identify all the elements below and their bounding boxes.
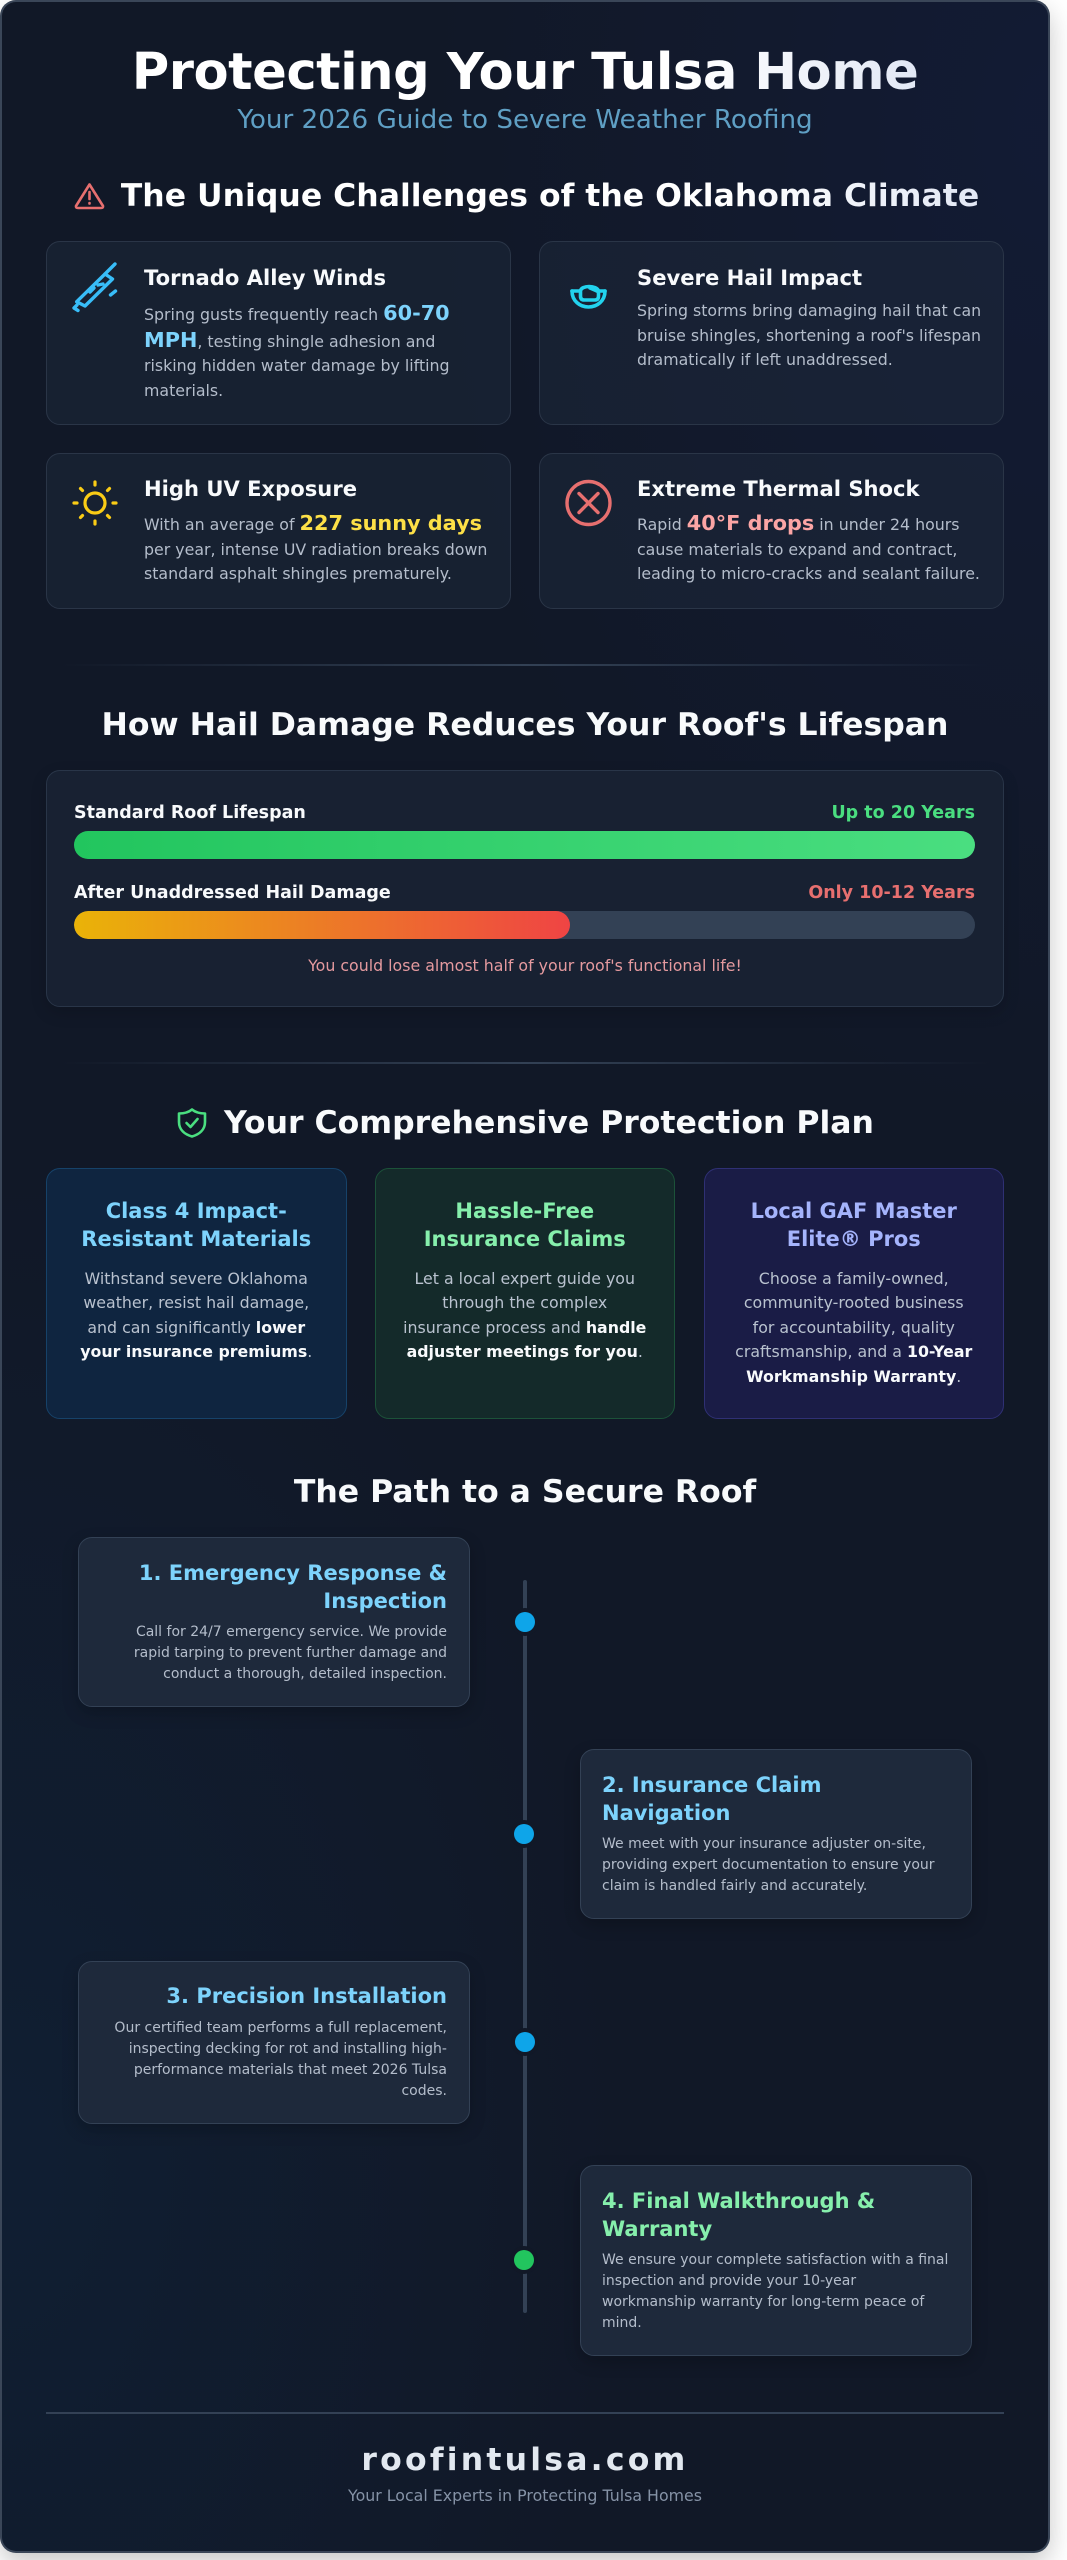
icon: shield check bbox=[178, 1108, 206, 1138]
label: standard: Standard Roof Lifespan bbox=[74, 803, 306, 823]
text: conduct a thorough, detailed inspection. bbox=[163, 1666, 447, 1682]
text: providing expert documentation to ensure your bbox=[602, 1857, 935, 1873]
bar: standard lifespan bbox=[74, 831, 975, 859]
icon: x circle bbox=[565, 480, 612, 526]
icon: wind bbox=[72, 262, 118, 312]
text: standard asphalt shingles prematurely. bbox=[144, 564, 452, 583]
text: leading to micro-cracks and sealant failure. bbox=[637, 564, 980, 583]
text bbox=[403, 1269, 646, 1361]
heading: challenges: The Unique Challenges of the Oklahoma Climate bbox=[121, 178, 979, 214]
text: craftsmanship, and a 10-Year bbox=[735, 1342, 972, 1361]
text bbox=[80, 1269, 312, 1361]
panel: insurance claims bbox=[374, 1168, 675, 1419]
heading bbox=[602, 2189, 875, 2241]
heading: Inspection bbox=[323, 1589, 447, 1613]
label: after damage: After Unaddressed Hail Damage bbox=[74, 883, 391, 903]
text: workmanship warranty for long-term peace of bbox=[602, 2294, 924, 2310]
heading: Hassle-Free bbox=[455, 1199, 594, 1223]
heading: Severe Hail Impact bbox=[637, 265, 862, 290]
bar: reduced lifespan bbox=[74, 911, 975, 939]
dot 3 bbox=[515, 2032, 535, 2052]
step 1 bbox=[78, 1537, 470, 1707]
heading: Navigation bbox=[602, 1801, 730, 1825]
text: mind. bbox=[602, 2315, 642, 2331]
timeline line bbox=[523, 1580, 527, 2313]
heading: Extreme Thermal Shock bbox=[637, 476, 920, 501]
text: performance materials that meet 2026 Tulsa bbox=[134, 2062, 447, 2078]
heading: Class 4 Impact- bbox=[106, 1199, 287, 1223]
title: Protecting Your Tulsa Home bbox=[132, 42, 918, 102]
text: Spring storms bring damaging hail that can bbox=[637, 301, 981, 320]
heading: Insurance Claims bbox=[424, 1227, 626, 1251]
text bbox=[637, 511, 980, 583]
text: rapid tarping to prevent further damage and bbox=[134, 1645, 447, 1661]
heading: 1. Emergency Response & bbox=[139, 1561, 447, 1585]
heading: protection plan: Your Comprehensive Protection Plan bbox=[224, 1105, 874, 1141]
heading: 4. Final Walkthrough & bbox=[602, 2189, 875, 2213]
panel: high uv exposure bbox=[46, 453, 511, 609]
text: We ensure your complete satisfaction with a final bbox=[602, 2252, 948, 2268]
footer tagline: Your Local Experts in Protecting Tulsa Homes bbox=[348, 2486, 702, 2505]
text: With an average of 227 sunny days bbox=[144, 511, 482, 535]
heading bbox=[424, 1199, 626, 1251]
text: Workmanship Warranty. bbox=[746, 1367, 961, 1386]
text: risking hidden water damage by lifting bbox=[144, 356, 450, 375]
text: through the complex bbox=[442, 1293, 607, 1312]
panel: extreme thermal shock bbox=[539, 453, 1004, 609]
text: insurance process and handle bbox=[403, 1318, 646, 1337]
panel: class 4 materials bbox=[46, 1168, 346, 1419]
text: Let a local expert guide you bbox=[415, 1269, 635, 1288]
heading: Local GAF Master bbox=[751, 1199, 957, 1223]
text: We meet with your insurance adjuster on-site, bbox=[602, 1836, 926, 1852]
heading: 3. Precision Installation bbox=[166, 1984, 447, 2008]
text: Withstand severe Oklahoma bbox=[85, 1269, 308, 1288]
text: Call for 24/7 emergency service. We provide bbox=[136, 1624, 447, 1640]
heading: High UV Exposure bbox=[144, 476, 357, 501]
text: claim is handled fairly and accurately. bbox=[602, 1878, 867, 1894]
text: adjuster meetings for you. bbox=[407, 1342, 643, 1361]
subtitle: Your 2026 Guide to Severe Weather Roofing bbox=[237, 105, 813, 135]
text bbox=[144, 511, 487, 583]
text: MPH, testing shingle adhesion and bbox=[144, 328, 435, 352]
heading: Resistant Materials bbox=[81, 1227, 311, 1251]
callout: You could lose almost half of your roof's functional life! bbox=[308, 956, 742, 975]
step 4 bbox=[580, 2165, 972, 2356]
icon: hail bbox=[570, 284, 607, 309]
dot 1 bbox=[515, 1612, 535, 1632]
panel: lifespan comparison bbox=[46, 770, 1004, 1007]
text: Spring gusts frequently reach 60-70 bbox=[144, 301, 450, 325]
text: inspection and provide your 10-year bbox=[602, 2273, 856, 2289]
panel: local pros bbox=[704, 1168, 1004, 1419]
text: for accountability, quality bbox=[753, 1318, 955, 1337]
text: community-rooted business bbox=[744, 1293, 964, 1312]
text: Choose a family-owned, bbox=[759, 1269, 949, 1288]
text: bruise shingles, shortening a roof's lifespan bbox=[637, 326, 981, 344]
text bbox=[602, 2252, 948, 2331]
text: and can significantly lower bbox=[87, 1318, 305, 1337]
heading: Elite® Pros bbox=[787, 1227, 921, 1251]
heading: path: The Path to a Secure Roof bbox=[294, 1474, 756, 1510]
heading: hail damage: How Hail Damage Reduces Your Roof's Lifespan bbox=[102, 707, 948, 743]
text: weather, resist hail damage, bbox=[83, 1293, 309, 1312]
text bbox=[735, 1269, 972, 1386]
step 2 bbox=[580, 1749, 972, 1919]
value: standard: Up to 20 Years bbox=[831, 803, 975, 823]
text bbox=[602, 1836, 935, 1894]
text: codes. bbox=[401, 2083, 447, 2099]
timeline bbox=[514, 1580, 535, 2313]
footer website: roofintulsa.com bbox=[361, 2442, 689, 2478]
text: Rapid 40°F drops in under 24 hours bbox=[637, 511, 960, 535]
text bbox=[114, 2020, 447, 2099]
heading: Tornado Alley Winds bbox=[144, 265, 386, 290]
panel: tornado alley winds bbox=[46, 241, 511, 425]
heading: 2. Insurance Claim bbox=[602, 1773, 821, 1797]
text: materials. bbox=[144, 380, 223, 400]
panel: severe hail impact bbox=[539, 241, 1004, 425]
heading bbox=[139, 1561, 447, 1613]
text bbox=[134, 1624, 447, 1682]
text bbox=[637, 301, 981, 369]
text: dramatically if left unaddressed. bbox=[637, 350, 893, 369]
heading: Warranty bbox=[602, 2217, 712, 2241]
text: inspecting decking for rot and installing high- bbox=[129, 2041, 447, 2057]
icon: alert triangle bbox=[74, 183, 104, 210]
heading bbox=[602, 1773, 821, 1825]
value: after damage: Only 10-12 Years bbox=[808, 883, 975, 903]
icon: sun bbox=[72, 480, 118, 526]
dot 2 bbox=[514, 1824, 534, 1844]
text: your insurance premiums. bbox=[80, 1342, 312, 1361]
text: Our certified team performs a full replacement, bbox=[114, 2020, 447, 2036]
step 3 bbox=[78, 1961, 470, 2124]
text: per year, intense UV radiation breaks down bbox=[144, 540, 487, 558]
heading bbox=[81, 1199, 311, 1251]
text bbox=[144, 301, 450, 400]
dot 4 bbox=[514, 2250, 534, 2270]
text: cause materials to expand and contract, bbox=[637, 540, 957, 558]
heading bbox=[751, 1199, 957, 1251]
